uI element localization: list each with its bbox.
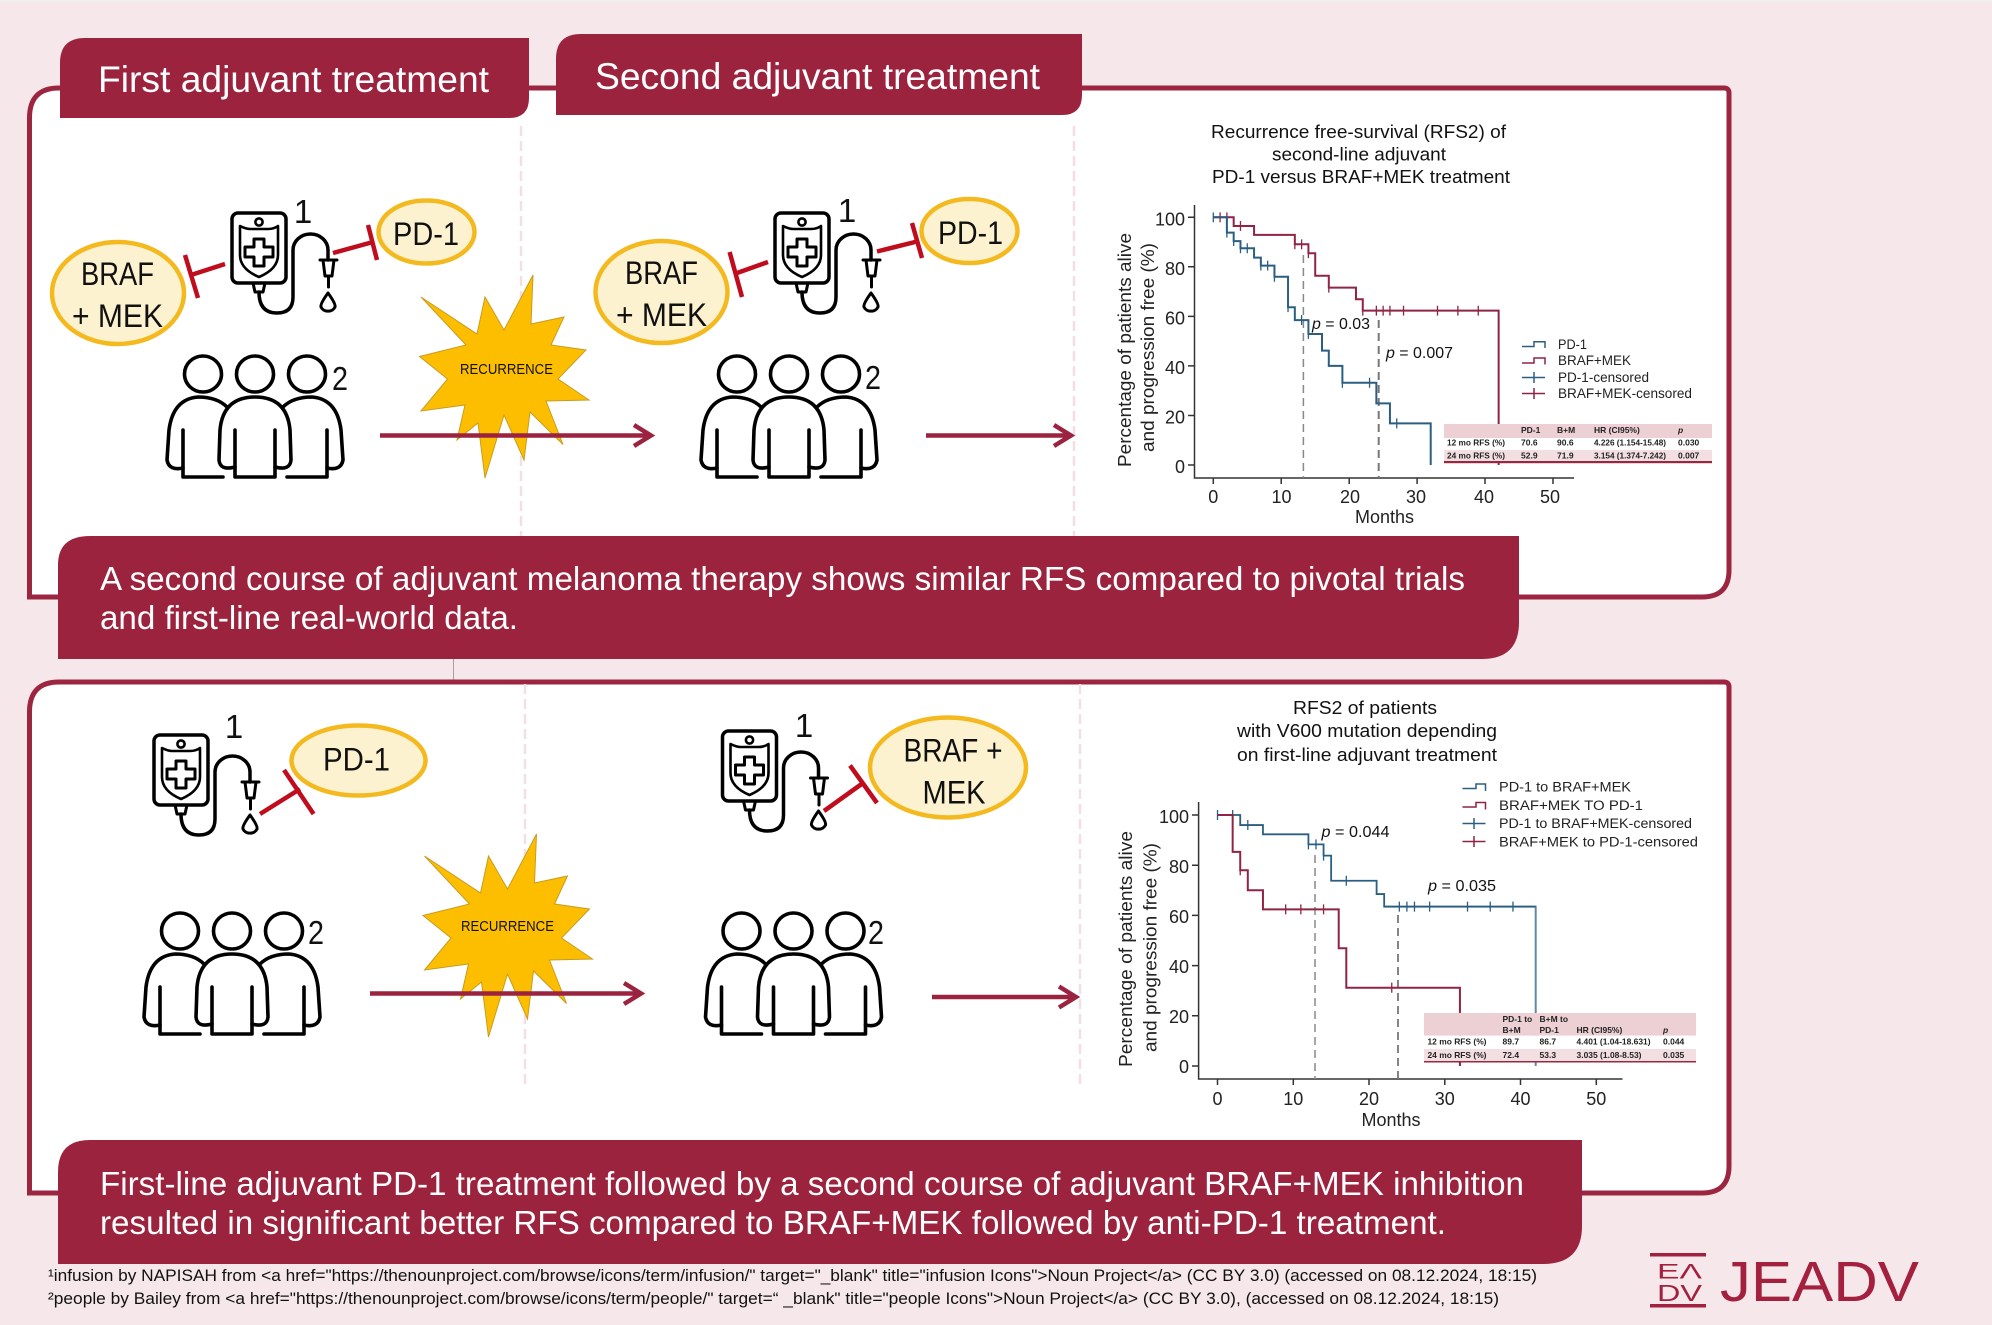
inhibitor: PD-1 [333, 225, 377, 260]
chart title: Recurrence free-survival (RFS2) of [1211, 122, 1507, 142]
chart title: with V600 mutation depending [1236, 721, 1497, 741]
axis tick labels: Months [1355, 507, 1414, 527]
data table [1444, 424, 1712, 463]
first treatment group, top row [52, 193, 474, 477]
axis tick labels: 100 [1155, 210, 1185, 230]
data table: 86.7 [1540, 1036, 1556, 1046]
conclusion banner: top: and first-line real-world data. [100, 599, 518, 636]
recurrence burst, top row: RECURRENCE [460, 362, 553, 378]
axis tick labels: 10 [1283, 1089, 1303, 1109]
data table: B+M [1502, 1025, 1521, 1035]
column dividers [521, 126, 1080, 1085]
axis tick labels [1155, 210, 1560, 527]
axis tick labels: 0 [1175, 457, 1185, 477]
legend: PD-1-censored [1558, 370, 1649, 385]
p values: p = 0.007 [1385, 345, 1453, 362]
axis tick labels: 40 [1474, 487, 1494, 507]
data table: 12 mo RFS (%) [1447, 438, 1505, 448]
logo: JEADV: EΛ [1657, 1260, 1702, 1284]
panel: bottom study section outline [30, 682, 1729, 1193]
chart title [1236, 698, 1497, 765]
footnote marker 1: 1 [838, 192, 856, 229]
chart title: second-line adjuvant [1272, 144, 1446, 164]
conclusion banner: bottom: resulted in significant better RFS compared to BRAF+MEK followed by anti-PD-1 treatment. [100, 1204, 1446, 1241]
axis tick labels: 0 [1212, 1089, 1223, 1109]
conclusion banner: top [58, 536, 1519, 659]
axes [1188, 205, 1574, 484]
icon: patients [701, 356, 877, 477]
heading tab: first adjuvant treatment: First adjuvant treatment [98, 59, 490, 100]
logo: JEADV: DV [1657, 1280, 1703, 1306]
icon: infusion bag [232, 213, 337, 313]
data table: p [1662, 1025, 1668, 1035]
oval: BRAF + MEK [870, 718, 1026, 818]
heading tab: second adjuvant treatment: Second adjuvant treatment [595, 56, 1041, 97]
data table: 12 mo RFS (%) [1428, 1036, 1487, 1046]
arrow: second treatment to chart, bottom row [932, 986, 1076, 1008]
footnote marker 1: 1 [225, 708, 243, 745]
footnote marker 2: 2 [308, 914, 324, 951]
heading tab: first adjuvant treatment [60, 38, 529, 118]
footnote marker 2: 2 [865, 359, 881, 396]
p values: p = 0.035 [1427, 878, 1496, 895]
y axis label: and progression free (%) [1140, 843, 1160, 1052]
axis tick labels: 30 [1406, 487, 1426, 507]
chart title: on first-line adjuvant treatment [1237, 745, 1497, 765]
legend [1462, 780, 1698, 850]
data table: HR (CI95%) [1576, 1025, 1622, 1035]
data table: 24 mo RFS (%) [1447, 450, 1505, 460]
first treatment group, bottom row [144, 708, 426, 1034]
footnote marker 2: 2 [332, 360, 348, 397]
legend: BRAF+MEK-censored [1558, 386, 1692, 401]
icon: patients [167, 356, 343, 477]
p values [1320, 824, 1496, 895]
icon: infusion bag [154, 735, 259, 835]
second treatment group, top row [596, 192, 1018, 477]
data table: 0.007 [1678, 450, 1700, 460]
data table: 3.154 (1.374-7.242) [1594, 450, 1666, 460]
inhibitor: BRAF + MEK [730, 252, 768, 297]
legend [1522, 337, 1692, 401]
axis tick labels: 40 [1165, 358, 1185, 378]
axis tick labels: 20 [1340, 487, 1360, 507]
oval: PD-1: PD-1 [323, 742, 390, 778]
footnotes: ¹infusion by NAPISAH from <a href="https://thenounproject.com/browse/icons/term/infusion/" target="_blank" title="infusion Icons">Noun Project</a> (CC BY 3.0) (accessed on 08.12.2024, 18:15) [48, 1266, 1537, 1285]
legend: PD-1 to BRAF+MEK [1499, 780, 1631, 794]
oval: BRAF + MEK: BRAF [81, 256, 154, 292]
legend: BRAF+MEK TO PD-1 [1499, 798, 1643, 813]
data table: 72.4 [1502, 1050, 1519, 1060]
axis tick labels: 60 [1165, 308, 1185, 328]
legend: PD-1 [1558, 337, 1587, 352]
axis tick labels: 80 [1165, 259, 1185, 279]
inhibitor: PD-1 [877, 223, 922, 258]
data table: 0.035 [1663, 1050, 1685, 1060]
oval: PD-1 [378, 200, 474, 264]
axis tick labels: 100 [1159, 807, 1189, 827]
data table: B+M [1557, 425, 1575, 435]
footnote marker 1: 1 [795, 707, 813, 744]
logo: JEADV: JEADV [1720, 1250, 1919, 1314]
footnote marker 1: 1 [294, 193, 312, 230]
data table: HR (CI95%) [1594, 425, 1640, 435]
data table: 52.9 [1521, 450, 1538, 460]
legend: BRAF+MEK to PD-1-censored [1499, 834, 1698, 850]
footnotes: ²people by Bailey from <a href="https://thenounproject.com/browse/icons/term/people/" target=“ _blank" title="people Icons">Noun Project</a> (CC BY 3.0), (accessed on 08.12.2024, 18:15) [48, 1289, 1499, 1308]
p values: p = 0.044 [1320, 824, 1390, 841]
chart title: RFS2 of patients [1293, 698, 1437, 718]
arrow: second treatment to chart, top row [926, 425, 1071, 446]
data table: p [1677, 425, 1683, 435]
footnotes [48, 1266, 1537, 1308]
axis tick labels: 50 [1540, 487, 1560, 507]
legend: BRAF+MEK [1558, 353, 1631, 368]
oval: BRAF + MEK [52, 242, 184, 344]
data table: 4.226 (1.154-15.48) [1594, 438, 1666, 448]
icon: infusion bag [722, 731, 828, 831]
data table: 0.044 [1663, 1036, 1685, 1046]
oval: BRAF + MEK: + MEK [616, 297, 707, 333]
oval: BRAF + MEK [596, 241, 728, 343]
conclusion banner: bottom: First-line adjuvant PD-1 treatment followed by a second course of adjuvant BRAF+MEK inhibition [100, 1165, 1524, 1202]
data table: 4.401 (1.04-18.631) [1576, 1036, 1651, 1046]
oval: PD-1 [292, 726, 426, 796]
icon: patients [144, 913, 320, 1034]
arrow: first to second treatment, top row [380, 425, 651, 446]
axis tick labels: 20 [1359, 1089, 1379, 1109]
axis tick labels: 30 [1435, 1089, 1455, 1109]
data table: B+M to [1540, 1014, 1568, 1024]
chart title: PD-1 versus BRAF+MEK treatment [1212, 167, 1510, 187]
axis tick labels: 50 [1586, 1089, 1606, 1109]
icon: patients [706, 913, 882, 1034]
axis tick labels: 0 [1208, 487, 1218, 507]
legend: PD-1 to BRAF+MEK-censored [1499, 816, 1692, 831]
arrow: first to second treatment, bottom row [370, 983, 641, 1004]
y axis label [1116, 831, 1160, 1067]
data table: 0.030 [1678, 438, 1700, 448]
logo: JEADV [1650, 1250, 1919, 1314]
axis tick labels: 60 [1169, 907, 1189, 927]
oval: BRAF + MEK: BRAF [625, 255, 698, 291]
data table: 71.9 [1557, 450, 1574, 460]
axis tick labels: Months [1361, 1110, 1421, 1130]
12 and 24 month reference lines [1315, 855, 1398, 1079]
data table: PD-1 to [1502, 1014, 1532, 1024]
inhibitor: BRAF + MEK [185, 255, 225, 298]
data table: 90.6 [1557, 438, 1574, 448]
panel: top study section outline [30, 88, 1729, 597]
oval: BRAF + MEK: BRAF + [904, 732, 1002, 768]
oval: PD-1 [922, 199, 1018, 263]
y axis label: and progression free (%) [1138, 243, 1158, 452]
data table: 70.6 [1521, 438, 1538, 448]
data table: 53.3 [1540, 1050, 1556, 1060]
axis tick labels: 10 [1271, 487, 1292, 507]
12 and 24 month reference lines [1303, 255, 1379, 478]
data table: 24 mo RFS (%) [1428, 1050, 1487, 1060]
axis tick labels: 40 [1169, 957, 1189, 977]
recurrence burst, top row [420, 275, 589, 478]
data table: PD-1 [1521, 425, 1541, 435]
conclusion banner: bottom [58, 1140, 1582, 1264]
inhibitor: BRAF + MEK [824, 766, 877, 811]
data table: 89.7 [1502, 1036, 1519, 1046]
connector line between panels [452, 659, 454, 682]
p values: p = 0.03 [1311, 316, 1370, 333]
icon: infusion bag [775, 213, 880, 313]
axis tick labels: 40 [1510, 1089, 1531, 1109]
axis tick labels [1159, 807, 1606, 1130]
oval: BRAF + MEK: + MEK [72, 298, 163, 334]
axes [1192, 802, 1622, 1085]
data table: 3.035 (1.08-8.53) [1576, 1050, 1642, 1060]
data table [1424, 1013, 1696, 1062]
y axis label [1115, 233, 1158, 467]
oval: BRAF + MEK: MEK [922, 774, 986, 810]
data table: PD-1 [1540, 1025, 1559, 1035]
heading tab: second adjuvant treatment [556, 34, 1082, 115]
oval: PD-1: PD-1 [393, 216, 459, 252]
survival curves [1218, 810, 1536, 1066]
axis tick labels: 20 [1169, 1007, 1189, 1027]
recurrence burst, bottom row [423, 834, 592, 1037]
axis tick labels: 0 [1179, 1057, 1189, 1077]
footnote marker 2: 2 [868, 914, 884, 951]
survival curves [1213, 212, 1499, 465]
chart: RFS2 by first-line treatment in V600 patients [1116, 698, 1698, 1130]
y axis label: Percentage of patients alive [1115, 233, 1135, 467]
chart title [1211, 122, 1510, 187]
second treatment group, bottom row [706, 707, 1026, 1034]
p values [1311, 316, 1453, 362]
axis tick labels: 20 [1165, 408, 1185, 428]
y axis label: Percentage of patients alive [1116, 831, 1136, 1067]
chart: RFS2 PD-1 versus BRAF+MEK [1115, 122, 1712, 527]
recurrence burst, bottom row: RECURRENCE [461, 919, 554, 935]
axis tick labels: 80 [1169, 857, 1189, 877]
inhibitor: PD-1 [260, 770, 314, 814]
conclusion banner: top: A second course of adjuvant melanoma therapy shows similar RFS compared to pivotal trials [100, 560, 1465, 597]
oval: PD-1: PD-1 [938, 215, 1003, 251]
